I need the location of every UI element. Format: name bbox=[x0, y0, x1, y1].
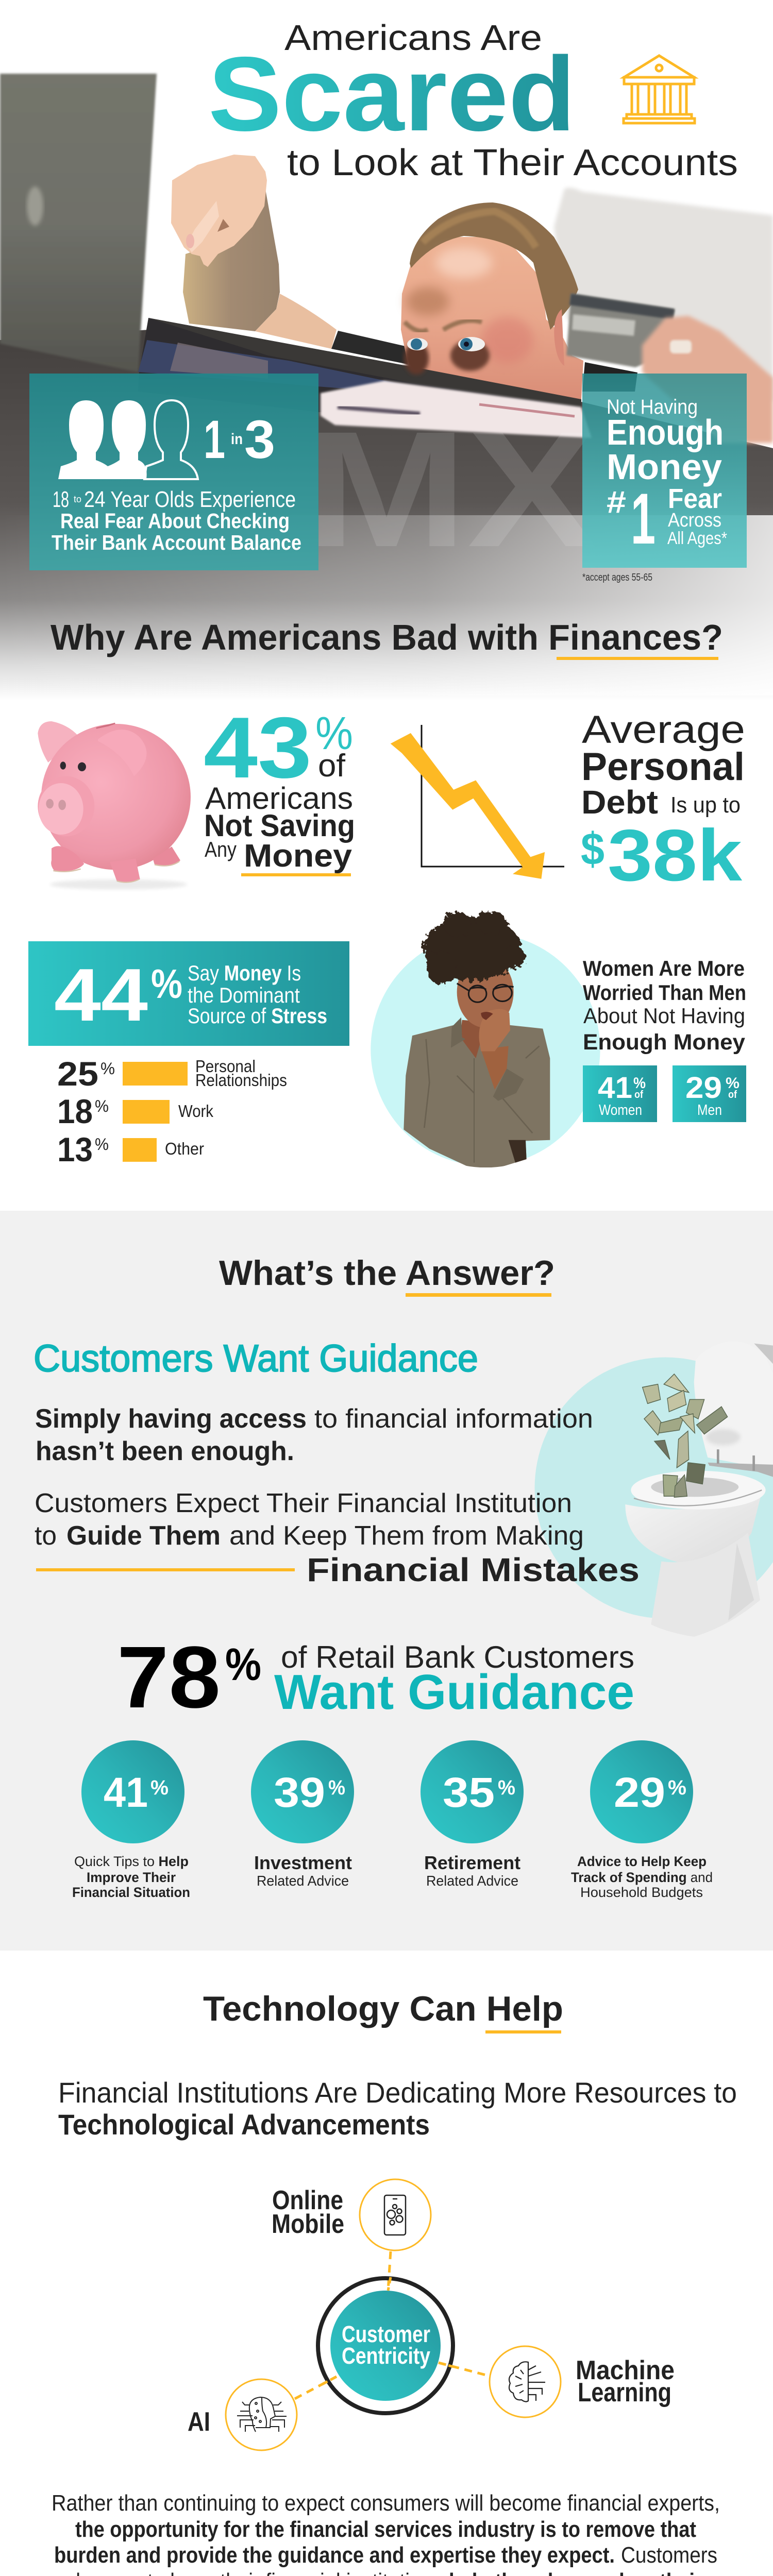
stat circle: 29 percent budgets bbox=[571, 1740, 713, 1900]
stat circle: 39 percent investment: 39 bbox=[274, 1769, 325, 1816]
decorative circle behind toilet bbox=[535, 1357, 773, 1619]
stat: 43 percent not saving: Not Saving bbox=[204, 808, 355, 843]
stat: average personal debt: Is up to bbox=[670, 792, 741, 818]
title: Scared bbox=[208, 35, 576, 153]
text block: financial institutions: Financial Institutions Are Dedicating More Resources to bbox=[58, 2076, 737, 2109]
panel: 44 percent stress: Source of Stress bbox=[188, 1004, 327, 1028]
illustration: worried woman bbox=[371, 911, 600, 1168]
footnote: *accept ages 55-65 bbox=[582, 572, 652, 583]
stat description: 24 Year Olds Experience bbox=[84, 487, 296, 512]
title: Americans Are bbox=[284, 18, 542, 58]
stat: 78 percent want guidance: % bbox=[225, 1639, 261, 1690]
stat: average personal debt bbox=[581, 708, 745, 896]
illustration: toilet with money bbox=[625, 1341, 773, 1637]
stat: average personal debt: 38k bbox=[608, 815, 743, 896]
stat circle: 39 percent investment: % bbox=[328, 1776, 345, 1799]
glasses bbox=[457, 984, 514, 1002]
chart: falling arrow bbox=[391, 725, 564, 879]
stat circle: 35 percent retirement bbox=[421, 1740, 524, 1889]
stat: 78 percent want guidance: Want Guidance bbox=[274, 1665, 634, 1720]
stat circle: 41 percent quick tips: 41 bbox=[104, 1769, 148, 1816]
stat description: 18 bbox=[53, 487, 69, 512]
stat box: women 41 percent: Women bbox=[599, 1102, 642, 1118]
pointing hand bbox=[171, 155, 267, 267]
node: AI: AI bbox=[188, 2407, 210, 2437]
panel: what's the answer background bbox=[0, 1211, 773, 1951]
1 in 3 bbox=[204, 410, 275, 470]
node: AI bbox=[188, 2379, 297, 2450]
bar chart: sources of stress: % bbox=[95, 1135, 109, 1154]
hub ring bbox=[318, 2277, 453, 2413]
panel: 44 percent stress: 44 bbox=[54, 953, 148, 1037]
women vs men worry text: Enough Money bbox=[583, 1030, 745, 1055]
text block: customers expect guidance: to bbox=[35, 1521, 57, 1551]
bar chart: sources of stress: Relationships bbox=[195, 1071, 287, 1090]
stat: 78 percent want guidance: of Retail Bank Customers bbox=[281, 1640, 634, 1674]
women vs men worry text: About Not Having bbox=[583, 1004, 745, 1028]
panel: 44 percent stress bbox=[28, 941, 349, 1046]
bar chart: sources of stress: Work bbox=[178, 1101, 213, 1121]
stat circle: 39 percent investment: Investment bbox=[254, 1852, 352, 1873]
text block: customers expect guidance: Financial Mistakes bbox=[307, 1551, 640, 1588]
bar chart: sources of stress: 18 bbox=[57, 1092, 93, 1130]
panel: number one fear: All Ages* bbox=[667, 529, 727, 548]
heading: why are Americans bad with finances: Why Are Americans Bad with Finances? bbox=[51, 617, 723, 657]
text block: financial institutions: Technological Advancements bbox=[58, 2108, 430, 2141]
stat circle: 29 percent budgets: Track of Spending and bbox=[571, 1870, 713, 1885]
text block: access to information bbox=[35, 1404, 593, 1466]
text block: closing paragraph: Customers bbox=[621, 2543, 717, 2568]
stat circle: 41 percent quick tips: Quick Tips to Help bbox=[74, 1854, 189, 1869]
stat circle: 41 percent quick tips: Improve Their bbox=[87, 1870, 176, 1885]
stat box: women 41 percent bbox=[583, 1065, 657, 1122]
stat: 78 percent want guidance: 78 bbox=[117, 1629, 221, 1726]
stat circle: 41 percent quick tips: % bbox=[150, 1776, 169, 1799]
women vs men worry text: Worried Than Men bbox=[583, 980, 746, 1005]
hero photo: man peeking over desk bbox=[0, 74, 773, 701]
node: machine learning: Machine bbox=[576, 2355, 675, 2385]
1 in 3: 3 bbox=[244, 410, 275, 470]
title: to Look at Their Accounts bbox=[287, 142, 738, 183]
connector lines bbox=[295, 2251, 488, 2399]
text block: customers expect guidance: Customers Expect Their Financial Institution bbox=[35, 1488, 572, 1518]
text block: financial institutions bbox=[58, 2076, 737, 2141]
node: machine learning bbox=[490, 2346, 675, 2417]
stat box: women 41 percent: % bbox=[633, 1075, 646, 1092]
icon: dollar bills bbox=[643, 1374, 728, 1497]
stat: average personal debt: Debt bbox=[581, 784, 658, 821]
panel: number one fear: 1 bbox=[631, 478, 656, 559]
icon: piggy bank bbox=[38, 721, 191, 890]
node: machine learning: Learning bbox=[578, 2378, 671, 2408]
hub ring: Centricity bbox=[342, 2343, 430, 2369]
stat: average personal debt: Average bbox=[582, 708, 745, 752]
stat box: men 29 percent: 29 bbox=[685, 1071, 722, 1105]
panel: number one fear: # bbox=[607, 485, 626, 519]
diagram: customer centricity hub bbox=[188, 2179, 675, 2450]
stat: 43 percent not saving: 43 bbox=[204, 699, 312, 796]
stat circle: 29 percent budgets: Advice to Help Keep bbox=[577, 1854, 707, 1869]
upper arm bbox=[183, 189, 280, 331]
women vs men worry text bbox=[583, 956, 746, 1055]
stat description bbox=[52, 487, 301, 554]
panel: number one fear: Enough bbox=[607, 412, 724, 452]
heading: technology can help: Technology Can Help bbox=[203, 1989, 563, 2028]
head bbox=[401, 237, 583, 399]
stat box: men 29 percent: Men bbox=[697, 1102, 722, 1118]
1 in 3: 1 bbox=[204, 410, 225, 470]
panel: number one fear: Fear bbox=[668, 483, 722, 514]
stat circle: 35 percent retirement: Related Advice bbox=[426, 1873, 518, 1889]
panel: 44 percent stress: the Dominant bbox=[188, 983, 300, 1007]
stat box: men 29 percent: of bbox=[728, 1089, 737, 1100]
bar chart: sources of stress: Personal bbox=[195, 1057, 256, 1076]
MX watermark: MX bbox=[306, 397, 598, 581]
bar chart: sources of stress: % bbox=[95, 1097, 109, 1115]
bar chart: sources of stress: 25 bbox=[57, 1055, 98, 1093]
stat circle: 35 percent retirement: % bbox=[498, 1776, 515, 1799]
heading: what's the answer: What’s the Answer? bbox=[219, 1253, 555, 1293]
text block: customers expect guidance bbox=[35, 1488, 640, 1588]
stat circle: 35 percent retirement: Retirement bbox=[424, 1852, 520, 1873]
text block: access to information: hasn’t been enough. bbox=[36, 1436, 294, 1466]
subheading: customers want guidance: Customers Want Guidance bbox=[33, 1337, 478, 1380]
1 in 3: in bbox=[231, 431, 243, 448]
bar chart: sources of stress: % bbox=[100, 1059, 115, 1078]
stat: 43 percent not saving: Money bbox=[244, 838, 352, 874]
node: online mobile: Mobile bbox=[272, 2209, 344, 2239]
text block: access to information: to financial information bbox=[314, 1404, 593, 1434]
panel: 44 percent stress: Say Money Is bbox=[188, 961, 301, 985]
stat: average personal debt: $ bbox=[581, 823, 604, 874]
bar chart: sources of stress: Other bbox=[165, 1139, 204, 1158]
node: online mobile bbox=[272, 2179, 431, 2250]
panel: number one fear bbox=[582, 374, 747, 568]
stat: 78 percent want guidance bbox=[117, 1629, 634, 1726]
panel: 44 percent stress: % bbox=[151, 961, 182, 1007]
stat box: men 29 percent: % bbox=[726, 1075, 740, 1092]
stat: 43 percent not saving: Any bbox=[205, 837, 237, 861]
title bbox=[208, 18, 738, 183]
stat box: men 29 percent bbox=[673, 1065, 746, 1122]
panel: number one fear: Money bbox=[607, 447, 722, 487]
stat description: Their Bank Account Balance bbox=[52, 531, 301, 554]
text block: access to information: Simply having access bbox=[35, 1404, 307, 1434]
stat box: women 41 percent: of bbox=[634, 1089, 643, 1100]
stat circle: 29 percent budgets: % bbox=[668, 1776, 686, 1799]
stat circle: 39 percent investment: Related Advice bbox=[257, 1873, 349, 1889]
stat description: to bbox=[74, 494, 81, 504]
stat description: Real Fear About Checking bbox=[60, 509, 290, 533]
node: online mobile: Online bbox=[272, 2185, 343, 2215]
text block: customers expect guidance: and Keep Them from Making bbox=[229, 1521, 584, 1551]
hub ring: Customer bbox=[342, 2321, 430, 2347]
text block: customers expect guidance: Guide Them bbox=[66, 1521, 221, 1551]
stat: 43 percent not saving: % bbox=[315, 708, 353, 759]
text block: closing paragraph bbox=[52, 2490, 720, 2576]
stat: 43 percent not saving: of bbox=[318, 748, 346, 784]
bar chart: sources of stress bbox=[57, 1055, 287, 1168]
icon: three people bbox=[58, 400, 198, 479]
panel: number one fear: Not Having bbox=[607, 396, 698, 418]
credit card and hand bbox=[566, 294, 675, 367]
stat: 43 percent not saving bbox=[204, 699, 355, 876]
stat: average personal debt: Personal bbox=[581, 745, 745, 789]
stat circle: 35 percent retirement: 35 bbox=[443, 1769, 495, 1816]
stat circle: 29 percent budgets: 29 bbox=[614, 1769, 665, 1816]
bar chart: sources of stress: 13 bbox=[57, 1130, 93, 1168]
stat: 43 percent not saving: Americans bbox=[205, 781, 353, 816]
icon: bank bbox=[624, 56, 695, 123]
text block: closing paragraph: burden and provide the guidance and expertise they expect. bbox=[54, 2543, 615, 2568]
stat circle: 29 percent budgets: Household Budgets bbox=[580, 1885, 703, 1900]
panel: number one fear: Across bbox=[668, 510, 721, 531]
stat circle: 41 percent quick tips bbox=[72, 1740, 190, 1900]
stat circle: 39 percent investment bbox=[251, 1740, 354, 1889]
stat circle: 41 percent quick tips: Financial Situation bbox=[72, 1885, 190, 1900]
women vs men worry text: Women Are More bbox=[583, 956, 745, 980]
panel: 1 in 3 stat bbox=[29, 374, 318, 570]
stat box: women 41 percent: 41 bbox=[598, 1071, 632, 1105]
